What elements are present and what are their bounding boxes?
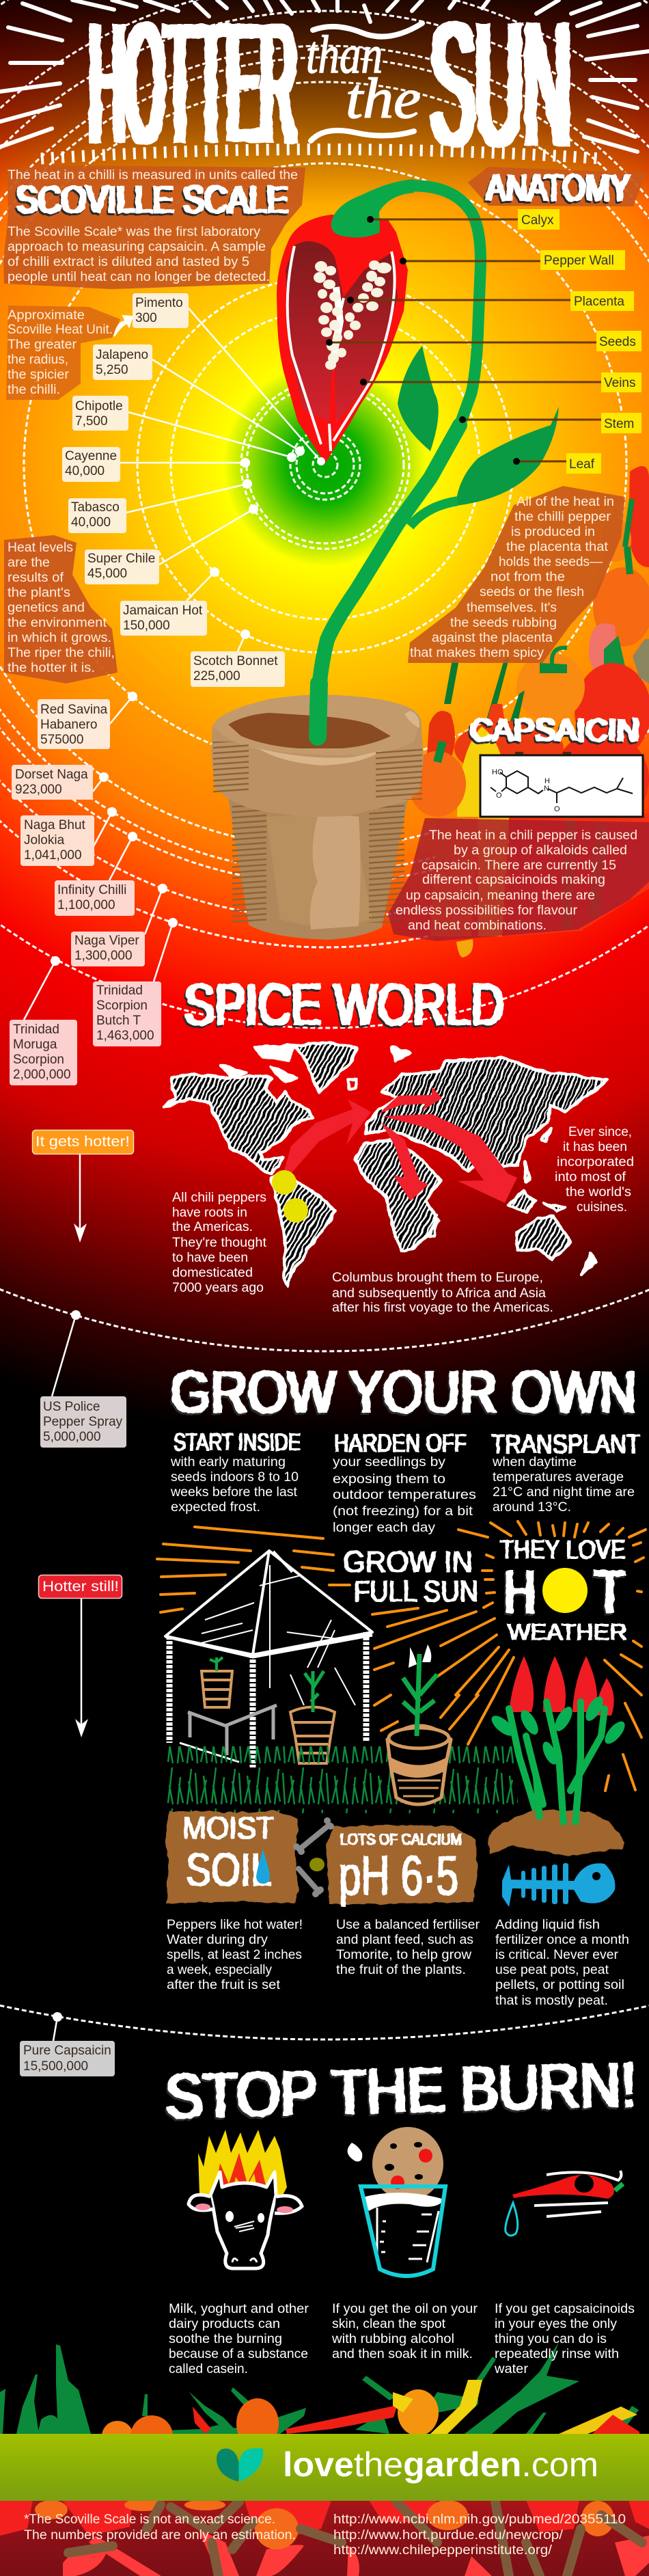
title sunburst rays	[0, 0, 649, 159]
panel: approximate scoville heat unit note: the chilli.	[8, 383, 60, 397]
tip: start inside	[170, 1429, 301, 1515]
footnote sources: http://www.chilepepperinstitute.org/	[333, 2543, 553, 2558]
label: scotch bonnet: Scotch Bonnet	[193, 654, 278, 668]
footer pepper background	[0, 2499, 649, 2576]
panel: capsaicin explanation: and heat combinations.	[408, 919, 547, 933]
orange sun rays	[157, 1521, 646, 1791]
label: naga viper: Naga Viper	[74, 934, 139, 948]
text: incorporated into cuisines: into most of	[555, 1170, 626, 1184]
africa	[355, 1139, 441, 1251]
label: trinidad scorpion butch t: Scorpion	[96, 999, 148, 1013]
pot body	[228, 798, 408, 940]
panel: heat levels note: are the	[8, 556, 50, 570]
icon: burning eye	[506, 2171, 623, 2236]
greenland	[294, 1042, 357, 1092]
arctic islands	[220, 1046, 297, 1082]
panel: heat levels note	[4, 535, 118, 683]
label: naga viper: 1,300,000	[74, 949, 133, 963]
footnote sources	[333, 2512, 626, 2558]
label: red savina habanero: Habanero	[40, 718, 97, 732]
text: incorporated into cuisines: the world's	[566, 1185, 631, 1199]
icon: fish skeleton	[502, 1863, 615, 1907]
text: skin tip	[331, 2302, 478, 2361]
label: red savina habanero: Red Savina	[40, 703, 108, 717]
icon: cow with flames	[189, 2130, 302, 2268]
callout: stem	[459, 413, 641, 433]
tip: start inside: seeds indoors 8 to 10	[171, 1470, 299, 1484]
indonesia	[508, 1191, 566, 1212]
panel: approximate scoville heat unit note: The greater	[8, 338, 77, 352]
world map with routes	[163, 1042, 607, 1286]
text: fish fertilizer tip: pellets, or potting soil	[495, 1978, 624, 1992]
grow in full sun	[343, 1545, 478, 1608]
panel: scoville scale intro: approach to measuring capsaicin. A sample	[8, 240, 266, 254]
panel: approximate scoville heat unit note: Approximate	[8, 308, 85, 323]
sign: moist soil	[165, 1810, 299, 1903]
panel: placenta note: the placenta that	[506, 540, 609, 554]
text: eyes tip	[494, 2302, 635, 2376]
heading: scoville scale: SCOVILLE SCALE	[16, 178, 288, 221]
text: fertiliser tip: Use a balanced fertiliser	[336, 1918, 480, 1932]
tip: transplant	[491, 1430, 640, 1515]
heading: capsaicin: CAPSAICIN	[470, 712, 639, 748]
they love hot weather	[500, 1536, 627, 1644]
text: chili roots: They're thought	[172, 1236, 267, 1250]
arrow: europe to indonesia	[383, 1114, 517, 1203]
panel: heat levels note: Heat levels	[8, 541, 73, 555]
panel: capsaicin explanation: up capsaicin, meaning there are	[406, 889, 595, 903]
tip: transplant: around 13°C.	[493, 1500, 571, 1515]
panel: approximate scoville heat unit note: Scoville Heat Unit.	[8, 323, 113, 337]
callout: veins	[360, 372, 641, 392]
logo leaves	[217, 2448, 263, 2482]
panel: capsaicin explanation	[388, 818, 649, 941]
text: chili roots: All chili peppers	[172, 1191, 266, 1205]
greenhouse	[165, 1551, 372, 1767]
terracotta pot	[211, 683, 424, 940]
callout: veins: Veins	[604, 376, 635, 390]
pile of chillies above the band	[0, 2342, 639, 2456]
label: red savina habanero: 575000	[40, 733, 83, 747]
footnote sources: http://www.ncbi.nlm.nih.gov/pubmed/20355110	[333, 2512, 626, 2527]
label: chipotle: 7,500	[75, 414, 108, 429]
panel: capsaicin explanation: by a group of alkaloids called	[454, 843, 627, 858]
label: us police pepper spray	[40, 1310, 126, 1448]
panel: capsaicin explanation: different capsaicinoids making	[422, 873, 605, 887]
label: tabasco	[68, 479, 252, 533]
text: fertiliser tip	[336, 1918, 480, 1977]
panel: heat levels note: genetics and	[8, 601, 85, 615]
label: cayenne: Cayenne	[65, 449, 117, 463]
text: dairy tip: soothe the burning	[169, 2332, 282, 2346]
tip: transplant: when daytime	[492, 1455, 577, 1469]
callout: hotter still: Hotter still!	[42, 1579, 119, 1595]
north america	[163, 1074, 313, 1174]
panel: approximate scoville heat unit note	[6, 306, 133, 400]
callout: it gets hotter	[33, 1130, 134, 1243]
text: moist soil tip	[167, 1918, 303, 1992]
text: skin tip: If you get the oil on your	[332, 2302, 478, 2316]
label: super chile	[85, 504, 258, 584]
icon: crossed bones and pebble	[293, 1817, 334, 1897]
capsaicin molecule diagram: O	[496, 791, 502, 800]
panel: placenta note	[408, 486, 625, 663]
label: naga viper	[71, 884, 167, 966]
they love hot weather: THEY LOVE	[500, 1536, 626, 1564]
text: fertiliser tip: Tomorite, to help grow	[336, 1948, 471, 1962]
text: dairy tip: dairy products can	[169, 2317, 280, 2331]
label: trinidad moruga scorpion: Trinidad	[13, 1022, 59, 1037]
label: cayenne: 40,000	[65, 464, 105, 478]
text: skin tip: skin, clean the spot	[332, 2317, 446, 2331]
text: eyes tip: repeatedly rinse with	[495, 2347, 619, 2361]
arrow: europe to asia	[378, 1087, 442, 1114]
label: jamaican hot: 150,000	[123, 619, 170, 633]
label: tabasco: Tabasco	[71, 500, 120, 515]
chilli body	[277, 215, 408, 463]
label: us police pepper spray: 5,000,000	[43, 1430, 101, 1444]
icon: cookie dipped in milk	[348, 2127, 445, 2276]
callout: seeds	[326, 331, 641, 351]
text: fertiliser tip: the fruit of the plants.	[336, 1963, 466, 1977]
footnote sources: http://www.hort.purdue.edu/newcrop/	[333, 2528, 564, 2543]
panel: heat levels note: The riper the chili,	[8, 646, 115, 660]
sign: calcium ph: LOTS OF CALCIUM	[340, 1830, 462, 1848]
label: jamaican hot	[120, 567, 219, 636]
leaf large	[456, 407, 559, 506]
tip: start inside: expected frost.	[171, 1500, 260, 1515]
marker: chilli origin north	[272, 1170, 296, 1195]
pepper seeds	[314, 260, 391, 370]
callout: calyx: Calyx	[521, 213, 554, 228]
heading: spice world: SPICE WORLD	[184, 973, 504, 1038]
text: moist soil tip: a week, especially	[167, 1963, 272, 1977]
panel: placenta note: not from the	[491, 570, 565, 584]
panel: heat levels note: the environment	[8, 616, 107, 630]
text: incorporated into cuisines: Ever since,	[568, 1125, 632, 1139]
white flower buds	[409, 1644, 431, 1668]
label: trinidad scorpion butch t: Trinidad	[96, 984, 143, 998]
label: tabasco: 40,000	[71, 515, 111, 530]
tip: transplant: temperatures average	[493, 1470, 624, 1484]
text: dairy tip: Milk, yoghurt and other	[169, 2302, 309, 2316]
capsaicin molecule diagram: H	[544, 777, 550, 785]
callout: pepper wall	[400, 250, 625, 270]
grow in full sun: GROW IN	[343, 1545, 473, 1579]
text: incorporated into cuisines	[555, 1125, 634, 1215]
panel: approximate scoville heat unit note: the spicier	[8, 368, 70, 382]
green sponsor band	[0, 2434, 649, 2501]
plant: stem, leaves and chilli pepper	[277, 179, 559, 724]
text: incorporated into cuisines: it has been	[563, 1140, 627, 1154]
callout: calyx	[367, 209, 560, 230]
pot stem base	[318, 683, 319, 737]
panel: placenta note: All of the heat in	[516, 495, 614, 509]
text: chili roots: have roots in	[172, 1206, 247, 1220]
sign: moist soil: SOIL	[186, 1844, 272, 1896]
text: columbus	[332, 1271, 553, 1315]
tip: harden off: longer each day	[333, 1521, 436, 1535]
panel: approximate scoville heat unit note: the radius,	[8, 353, 68, 367]
south america	[271, 1174, 335, 1286]
label: trinidad scorpion butch t: Butch T	[96, 1014, 141, 1028]
callout: placenta: Placenta	[574, 295, 624, 309]
marker: chilli origin south	[284, 1198, 308, 1223]
text: fish fertilizer tip: that is mostly peat.	[495, 1994, 608, 2008]
label: scotch bonnet: 225,000	[193, 669, 240, 683]
callout: hotter still	[38, 1575, 122, 1737]
panel: heat levels note: in which it grows.	[8, 631, 111, 645]
panel: capsaicin explanation: endless possibilities for flavour	[396, 904, 578, 918]
grow in full sun: FULL SUN	[354, 1575, 478, 1608]
text: fish fertilizer tip: use peat pots, peat	[495, 1963, 609, 1977]
pepper cavity right	[335, 253, 398, 424]
callout: leaf: Leaf	[569, 457, 595, 472]
title: Hotter than the Sun: the	[346, 67, 421, 131]
label: trinidad moruga scorpion	[10, 956, 77, 1085]
seedling pot	[290, 1671, 335, 1763]
panel: scoville scale intro: The Scoville Scale* was the first laboratory	[8, 225, 261, 239]
text: chili roots: to have been	[172, 1251, 248, 1265]
tip: transplant: 21°C and night time are	[493, 1485, 635, 1500]
text: incorporated into cuisines: cuisines.	[577, 1200, 627, 1215]
text: moist soil tip: spells, at least 2 inches	[167, 1948, 302, 1962]
scoville chart labels	[10, 293, 325, 2076]
calyx	[331, 179, 414, 238]
label: trinidad moruga scorpion: Scorpion	[13, 1053, 64, 1067]
chili plant with red peppers	[488, 1656, 629, 1856]
label: us police pepper spray: US Police	[43, 1400, 100, 1414]
tip: start inside: START INSIDE	[174, 1429, 301, 1456]
panel: placenta note: against the placenta	[432, 631, 553, 645]
text: chili roots: the Americas.	[172, 1220, 253, 1234]
tip: start inside: weeks before the last	[170, 1485, 298, 1500]
label: jamaican hot: Jamaican Hot	[123, 604, 203, 618]
panel: heat levels note: the hotter it is.	[8, 661, 95, 675]
footnote disclaimer	[24, 2512, 296, 2543]
panel: capsaicin explanation: capsaicin. There are currently 15	[422, 858, 616, 873]
panel: capsaicin explanation: The heat in a chili pepper is caused	[429, 828, 637, 843]
new zealand	[581, 1253, 596, 1275]
text: fish fertilizer tip: Adding liquid fish	[495, 1918, 600, 1932]
callout: placenta	[347, 291, 634, 311]
flowering plant in pot	[387, 1644, 451, 1804]
label: pure capsaicin: Pure Capsaicin	[23, 2044, 111, 2058]
text: chili roots: 7000 years ago	[172, 1281, 264, 1295]
arrow: americas to europe	[282, 1099, 371, 1178]
text: fish fertilizer tip: fertilizer once a month	[495, 1933, 629, 1947]
text: skin tip: and then soak it in milk.	[332, 2347, 473, 2361]
callout: stem: Stem	[604, 417, 634, 431]
capsaicin molecule diagram: N	[544, 785, 549, 793]
arrow: europe to africa	[381, 1122, 428, 1201]
text: moist soil tip: after the fruit is set	[167, 1978, 281, 1992]
label: trinidad scorpion butch t: 1,463,000	[96, 1029, 154, 1043]
iceland	[348, 1080, 357, 1088]
panel: placenta note: seeds or the flesh	[480, 585, 584, 599]
label: pure capsaicin	[20, 2012, 115, 2076]
panel: placenta note: holds the seeds—	[499, 555, 603, 569]
pepper cavity left	[286, 241, 344, 422]
panel: scoville scale intro: The heat in a chilli is measured in units called the	[8, 168, 298, 182]
callout: pepper wall: Pepper Wall	[544, 254, 614, 268]
title: Hotter than the Sun: than	[306, 25, 383, 84]
leaf small	[398, 346, 439, 451]
footnote disclaimer: The numbers provided are only an estimation.	[24, 2528, 296, 2543]
text: dairy tip: called casein.	[169, 2362, 248, 2376]
text: skin tip: with rubbing alcohol	[331, 2332, 454, 2346]
japan	[525, 1128, 551, 1182]
capsaicin molecule diagram: O	[554, 805, 560, 813]
callout: seeds: Seeds	[599, 335, 636, 349]
soil mound	[488, 1810, 625, 1856]
text: dairy tip: because of a substance	[169, 2347, 308, 2361]
tip: harden off: (not freezing) for a bit	[333, 1504, 473, 1519]
label: pimento: 300	[135, 311, 157, 325]
text: dairy tip	[169, 2302, 309, 2376]
icon: water drop	[256, 1849, 270, 1884]
tip: harden off: exposing them to	[333, 1472, 445, 1487]
label: jalapeno: Jalapeno	[96, 348, 148, 362]
label: scotch bonnet	[191, 629, 285, 687]
small pot on table	[202, 1657, 232, 1707]
grass	[167, 1746, 518, 1813]
label: infinity chilli	[55, 832, 137, 916]
label: jalapeno: 5,250	[96, 363, 128, 377]
panel: placenta note: that makes them spicy	[410, 646, 544, 660]
concentric scoville rings	[0, 0, 649, 2039]
panel: placenta note: is produced in	[511, 525, 595, 539]
sign: moist soil: MOIST	[182, 1811, 274, 1845]
panel: placenta note: the chilli pepper	[514, 510, 611, 524]
plant stem	[410, 186, 481, 425]
text: eyes tip: water	[494, 2362, 529, 2376]
eurasia	[365, 1057, 607, 1171]
label: jalapeno	[93, 344, 305, 456]
label: chipotle: Chipotle	[75, 399, 123, 413]
panel: heat levels note: the plant's	[8, 586, 70, 600]
label: red savina habanero	[38, 692, 137, 749]
label: naga bhut jolokia: 1,041,000	[24, 848, 82, 863]
sign: calcium ph: pH 6·5	[339, 1845, 458, 1907]
tip: harden off: HARDEN OFF	[334, 1429, 467, 1457]
label: pure capsaicin: 15,500,000	[23, 2059, 88, 2074]
label: infinity chilli: 1,100,000	[57, 898, 115, 912]
label: super chile: Super Chile	[87, 552, 155, 566]
text: moist soil tip: Water during dry	[167, 1933, 268, 1947]
they love hot weather: H	[504, 1558, 536, 1625]
capsaicin molecule diagram	[480, 755, 643, 817]
capsaicin molecule diagram: HO	[492, 768, 503, 776]
flames	[198, 2130, 287, 2197]
text: eyes tip: If you get capsaicinoids	[495, 2302, 635, 2316]
text: columbus: after his first voyage to the Americas.	[332, 1301, 553, 1315]
pot rim	[211, 695, 424, 817]
label: us police pepper spray: Pepper Spray	[43, 1415, 123, 1429]
tip: harden off: outdoor temperatures	[333, 1488, 476, 1502]
label: trinidad moruga scorpion: 2,000,000	[13, 1068, 71, 1082]
label: naga bhut jolokia: Naga Bhut	[24, 818, 86, 832]
panel: scoville scale intro: people until heat can no longer be detected.	[8, 270, 270, 284]
text: columbus: Columbus brought them to Europe,	[332, 1271, 543, 1285]
text: eyes tip: in your eyes the only	[495, 2317, 618, 2331]
label: infinity chilli: Infinity Chilli	[57, 883, 126, 897]
panel: placenta note: the seeds rubbing	[450, 616, 557, 630]
label: chipotle	[72, 396, 296, 462]
label: super chile: 45,000	[87, 567, 127, 581]
panel: scoville scale intro	[3, 165, 305, 289]
label: cayenne	[62, 447, 250, 482]
text: eyes tip: thing you can do is	[495, 2332, 607, 2346]
panel: placenta note: themselves. It's	[467, 601, 557, 615]
label: dorset naga: 923,000	[15, 783, 62, 797]
madagascar	[429, 1215, 437, 1236]
icon: sun as letter o	[542, 1568, 588, 1613]
callout: it gets hotter: It gets hotter!	[36, 1134, 130, 1150]
tip: start inside: with early maturing	[170, 1455, 286, 1469]
tip: harden off	[333, 1429, 476, 1535]
label: trinidad moruga scorpion: Moruga	[13, 1038, 57, 1052]
they love hot weather: T	[594, 1558, 626, 1625]
anatomy callouts	[326, 209, 641, 474]
label: pimento	[133, 293, 325, 465]
panel: heat levels note: results of	[8, 571, 64, 585]
label: trinidad scorpion butch t	[93, 918, 178, 1046]
callout: leaf	[513, 453, 601, 474]
australia	[517, 1217, 570, 1259]
label: naga bhut jolokia: Jolokia	[24, 833, 65, 848]
label: naga bhut jolokia	[20, 807, 117, 866]
they love hot weather: WEATHER	[508, 1619, 627, 1644]
text: columbus: and subsequently to Africa and Asia	[332, 1286, 546, 1301]
footnote disclaimer: *The Scoville Scale is not an exact science.	[24, 2512, 275, 2527]
icon: curved arrow to pimento	[114, 316, 133, 336]
logo wordmark: lovethegarden.com	[283, 2445, 598, 2484]
greenhouse table	[188, 1705, 277, 1755]
text: moist soil tip: Peppers like hot water!	[167, 1918, 303, 1932]
text: chili roots: domesticated	[172, 1266, 253, 1280]
svalbard	[392, 1047, 410, 1061]
label: dorset naga	[12, 765, 109, 800]
text: fish fertilizer tip	[495, 1918, 629, 2008]
text: fertiliser tip: and plant feed, such as	[336, 1933, 473, 1947]
pepper cluster beside the pot	[409, 466, 649, 958]
label: pimento: Pimento	[135, 296, 183, 310]
text: fish fertilizer tip: is critical. Never ever	[495, 1948, 619, 1962]
label: dorset naga: Dorset Naga	[15, 768, 88, 782]
panel: scoville scale intro: of chilli extract is diluted and tasted by 5	[8, 255, 249, 269]
tip: harden off: your seedlings by	[333, 1455, 446, 1469]
text: incorporated into cuisines: incorporated	[557, 1155, 634, 1169]
sign: calcium ph	[325, 1825, 478, 1907]
soil	[228, 713, 391, 748]
head	[210, 2172, 276, 2268]
text: chili roots	[172, 1191, 267, 1295]
